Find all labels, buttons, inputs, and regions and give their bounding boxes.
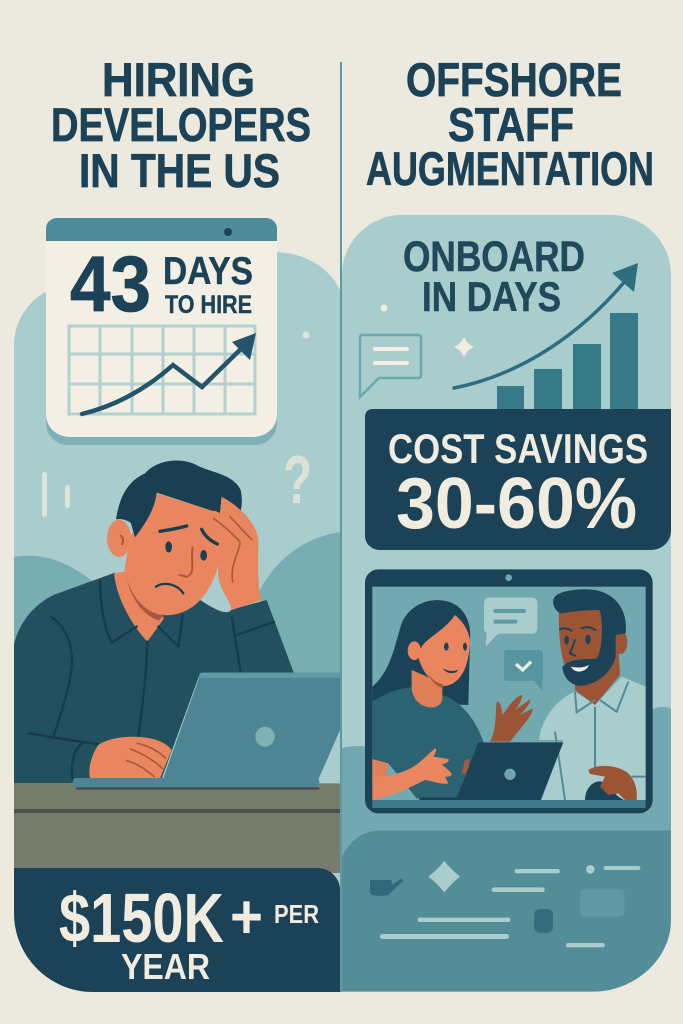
panel: hiring in the us xyxy=(13,250,342,995)
center divider xyxy=(340,62,342,992)
hair xyxy=(116,460,242,537)
growth arrow xyxy=(454,263,638,388)
illustration: stressed man at laptop xyxy=(13,460,294,783)
neck xyxy=(114,570,164,642)
illustration: laptop xyxy=(73,673,342,790)
trend arrow xyxy=(82,333,256,414)
title: offshore staff augmentation: STAFF xyxy=(448,98,574,151)
footer band with decorative shapes xyxy=(342,831,671,992)
heading: onboard in days: IN DAYS xyxy=(422,273,561,320)
heading: onboard in days: ONBOARD xyxy=(403,233,585,281)
banner: salary cost: YEAR xyxy=(121,946,210,987)
gesturing hand xyxy=(490,695,533,742)
small icons and lines xyxy=(370,861,640,947)
callout: cost savings: 30-60% xyxy=(396,464,637,544)
calendar card: 43 days to hire xyxy=(46,218,277,445)
shirt xyxy=(13,573,294,783)
typing hand xyxy=(89,737,172,778)
ear xyxy=(107,520,131,557)
banner: salary cost: $150K xyxy=(59,879,224,957)
panel: offshore staff augmentation xyxy=(342,215,671,992)
facial features xyxy=(156,526,217,593)
banner: salary cost: + xyxy=(230,883,263,952)
lower hill xyxy=(342,707,671,900)
bar chart xyxy=(497,313,638,410)
icon: question mark: ? xyxy=(283,442,312,518)
label: days to hire xyxy=(163,250,253,319)
callout: cost savings xyxy=(365,409,671,550)
neck shadow xyxy=(127,578,164,621)
title: hiring developers in the us: IN THE US xyxy=(79,144,280,197)
stat: 43: 43 xyxy=(70,239,151,328)
background hills xyxy=(14,532,340,672)
title: hiring developers in the us xyxy=(51,53,311,197)
desk xyxy=(14,783,340,873)
small laptop xyxy=(418,742,563,802)
icon: chat bubble xyxy=(360,335,421,397)
check bubble xyxy=(504,650,543,691)
label: days to hire: DAYS xyxy=(163,250,253,293)
heading: onboard in days xyxy=(403,233,585,320)
banner: salary cost: PER xyxy=(274,899,319,929)
banner: salary cost xyxy=(14,868,340,992)
title: hiring developers in the us: HIRING xyxy=(102,53,255,106)
speech bubble xyxy=(484,598,537,647)
illustration: video call tablet xyxy=(365,569,653,813)
decorative dot and marks xyxy=(42,332,310,517)
person: man xyxy=(539,589,646,801)
title: hiring developers in the us: DEVELOPERS xyxy=(51,98,311,151)
decorative dot xyxy=(380,304,388,312)
face xyxy=(124,493,222,615)
title: offshore staff augmentation: OFFSHORE xyxy=(406,53,622,106)
raised hand xyxy=(208,497,262,610)
calendar grid xyxy=(69,326,255,414)
shirt seams xyxy=(28,580,274,780)
label: days to hire: TO HIRE xyxy=(165,291,252,319)
icon: sparkle xyxy=(454,337,474,357)
person: woman xyxy=(372,600,483,800)
title: offshore staff augmentation xyxy=(366,53,654,195)
